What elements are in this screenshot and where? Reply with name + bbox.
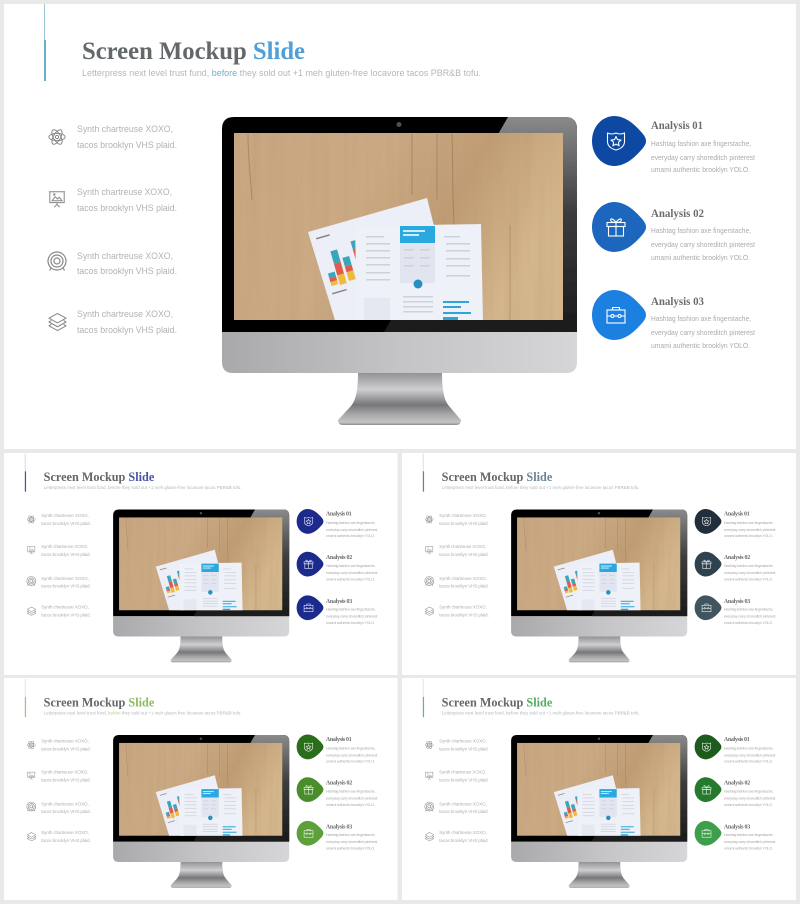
feature list: Synth chartreuse XOXO, <box>41 576 89 581</box>
feature list: Synth chartreuse XOXO, <box>439 738 487 743</box>
feature list <box>425 738 489 843</box>
feature list: Synth chartreuse XOXO, <box>41 830 89 835</box>
feature list: tacos brooklyn VHS plaid. <box>439 778 489 783</box>
feature list: Synth chartreuse XOXO, <box>41 738 89 743</box>
analysis column: Analysis 01 <box>724 737 750 743</box>
feature list: Synth chartreuse XOXO, <box>439 770 486 775</box>
accent bar <box>44 4 46 81</box>
analysis 02: umami authentic brooklyn YOLO. <box>651 253 750 262</box>
feature text 4: Synth chartreuse XOXO, <box>77 309 173 320</box>
title: Screen Mockup Slide <box>442 695 553 709</box>
analysis column: everyday carry shoreditch pinterest <box>724 753 775 757</box>
analysis column: umami authentic brooklyn YOLO. <box>724 803 773 807</box>
analysis column: umami authentic brooklyn YOLO. <box>724 847 773 851</box>
panel: main slide <box>4 4 796 449</box>
accent bar <box>25 453 26 492</box>
analysis column: Analysis 02 <box>326 781 352 787</box>
feature text 2: tacos brooklyn VHS plaid. <box>77 203 177 214</box>
analysis column: Hashtag fashion axe fingerstache, <box>724 833 773 837</box>
analysis column: umami authentic brooklyn YOLO. <box>724 621 773 625</box>
analysis column <box>695 735 775 851</box>
analysis column: Analysis 02 <box>724 781 750 787</box>
analysis column: Analysis 03 <box>724 824 750 830</box>
icon: atom <box>49 128 65 146</box>
analysis column: everyday carry shoreditch pinterest <box>724 840 775 844</box>
analysis column: Analysis 01 <box>326 737 352 743</box>
subtitle: Letterpress next level trust fund, before they sold out +1 meh gluten-free locavore tacos PBR&B tofu. <box>44 711 242 716</box>
analysis column <box>297 509 377 625</box>
analysis column: umami authentic brooklyn YOLO. <box>724 577 773 581</box>
analysis column: Hashtag fashion axe fingerstache, <box>326 833 375 837</box>
feature text 3: tacos brooklyn VHS plaid. <box>77 266 177 277</box>
feature list: Synth chartreuse XOXO, <box>439 801 487 806</box>
feature list: Synth chartreuse XOXO, <box>439 544 486 549</box>
feature list: tacos brooklyn VHS plaid. <box>439 613 489 618</box>
feature list: tacos brooklyn VHS plaid. <box>439 552 489 557</box>
title: Screen Mockup Slide <box>442 470 553 484</box>
analysis column: umami authentic brooklyn YOLO. <box>326 847 375 851</box>
analysis column: everyday carry shoreditch pinterest <box>326 840 377 844</box>
analysis column: everyday carry shoreditch pinterest <box>724 571 775 575</box>
analysis column: Hashtag fashion axe fingerstache, <box>326 608 375 612</box>
title: Screen Mockup Slide <box>44 695 155 709</box>
analysis column: everyday carry shoreditch pinterest <box>326 753 377 757</box>
feature list: Synth chartreuse XOXO, <box>41 605 89 610</box>
feature text 3 <box>77 251 177 277</box>
feature list: tacos brooklyn VHS plaid. <box>41 552 91 557</box>
analysis column: Hashtag fashion axe fingerstache, <box>326 521 375 525</box>
analysis 01 <box>592 116 756 174</box>
feature list: tacos brooklyn VHS plaid. <box>439 521 489 526</box>
feature list: tacos brooklyn VHS plaid. <box>41 521 91 526</box>
analysis column: Analysis 01 <box>326 511 352 517</box>
analysis column: umami authentic brooklyn YOLO. <box>724 534 773 538</box>
analysis column: Analysis 02 <box>724 555 750 561</box>
analysis column: umami authentic brooklyn YOLO. <box>724 759 773 763</box>
analysis column: Hashtag fashion axe fingerstache, <box>724 790 773 794</box>
subtitle: Letterpress next level trust fund, before they sold out +1 meh gluten-free locavore tacos PBR&B tofu. <box>442 711 640 716</box>
analysis column: Analysis 03 <box>326 824 352 830</box>
feature list: tacos brooklyn VHS plaid. <box>41 838 91 843</box>
analysis 01: Hashtag fashion axe fingerstache, <box>651 139 751 148</box>
feature text 1 <box>77 124 177 151</box>
accent bar <box>423 679 424 717</box>
panel: navy variant slide <box>4 453 398 675</box>
panel: olive green variant slide <box>4 678 398 900</box>
analysis 03 <box>592 290 756 350</box>
analysis column: Hashtag fashion axe fingerstache, <box>724 746 773 750</box>
feature text 3: Synth chartreuse XOXO, <box>77 251 173 262</box>
analysis column: umami authentic brooklyn YOLO. <box>326 621 375 625</box>
feature list <box>27 738 91 843</box>
feature list: Synth chartreuse XOXO, <box>41 513 89 518</box>
panel: forest green variant slide <box>402 678 796 900</box>
feature list: tacos brooklyn VHS plaid. <box>439 809 489 814</box>
analysis 03: everyday carry shoreditch pinterest <box>651 328 756 337</box>
analysis column: umami authentic brooklyn YOLO. <box>326 534 375 538</box>
monitor mockup <box>511 735 687 888</box>
icon: target <box>48 252 66 270</box>
feature text 4: tacos brooklyn VHS plaid. <box>77 325 177 336</box>
analysis column: Hashtag fashion axe fingerstache, <box>326 746 375 750</box>
analysis column: Analysis 02 <box>326 555 352 561</box>
analysis column: everyday carry shoreditch pinterest <box>326 528 377 532</box>
analysis column <box>695 509 775 625</box>
panel: slate variant slide <box>402 453 796 675</box>
feature list: Synth chartreuse XOXO, <box>41 770 88 775</box>
monitor mockup <box>113 735 289 888</box>
feature text 1: tacos brooklyn VHS plaid. <box>77 140 177 151</box>
icon: layers <box>49 313 66 331</box>
feature list: Synth chartreuse XOXO, <box>439 830 487 835</box>
analysis column: umami authentic brooklyn YOLO. <box>326 759 375 763</box>
analysis column: Hashtag fashion axe fingerstache, <box>326 564 375 568</box>
analysis column: everyday carry shoreditch pinterest <box>326 615 377 619</box>
feature list: tacos brooklyn VHS plaid. <box>439 838 489 843</box>
analysis 01: Analysis 01 <box>651 118 703 132</box>
feature list: tacos brooklyn VHS plaid. <box>41 583 91 588</box>
analysis 03: Hashtag fashion axe fingerstache, <box>651 314 751 323</box>
monitor mockup <box>222 117 577 425</box>
analysis 02: Analysis 02 <box>651 206 704 220</box>
analysis column: Hashtag fashion axe fingerstache, <box>724 521 773 525</box>
analysis 02: Hashtag fashion axe fingerstache, <box>651 226 751 235</box>
analysis column: everyday carry shoreditch pinterest <box>724 615 775 619</box>
feature list: Synth chartreuse XOXO, <box>41 544 88 549</box>
analysis column: Analysis 03 <box>326 599 352 605</box>
feature list: tacos brooklyn VHS plaid. <box>41 613 91 618</box>
analysis column: Analysis 03 <box>724 599 750 605</box>
monitor mockup <box>511 510 687 662</box>
accent bar <box>25 679 26 717</box>
analysis column: Hashtag fashion axe fingerstache, <box>724 564 773 568</box>
analysis column: everyday carry shoreditch pinterest <box>724 528 775 532</box>
feature list <box>27 513 91 618</box>
feature list: tacos brooklyn VHS plaid. <box>41 778 91 783</box>
analysis column: everyday carry shoreditch pinterest <box>326 571 377 575</box>
analysis column: umami authentic brooklyn YOLO. <box>326 577 375 581</box>
analysis 02: everyday carry shoreditch pinterest <box>651 240 756 249</box>
title: Screen Mockup Slide <box>82 38 305 65</box>
accent bar <box>423 453 424 492</box>
feature list: tacos brooklyn VHS plaid. <box>439 746 489 751</box>
feature list: Synth chartreuse XOXO, <box>439 605 487 610</box>
analysis column: Hashtag fashion axe fingerstache, <box>724 608 773 612</box>
analysis column: everyday carry shoreditch pinterest <box>326 797 377 801</box>
analysis column: Analysis 01 <box>724 511 750 517</box>
feature text 4 <box>77 309 177 336</box>
feature list <box>425 513 489 618</box>
title: Screen Mockup Slide <box>44 470 155 484</box>
analysis 01: umami authentic brooklyn YOLO. <box>651 165 750 174</box>
analysis 02 <box>592 202 756 262</box>
analysis 01: everyday carry shoreditch pinterest <box>651 153 756 162</box>
analysis column: umami authentic brooklyn YOLO. <box>326 803 375 807</box>
monitor mockup <box>113 510 289 662</box>
analysis column: Hashtag fashion axe fingerstache, <box>326 790 375 794</box>
subtitle: Letterpress next level trust fund, before they sold out +1 meh gluten-free locavore tacos PBR&B tofu. <box>442 485 640 490</box>
feature text 2: Synth chartreuse XOXO, <box>77 187 172 198</box>
feature text 2 <box>77 187 177 214</box>
analysis 03: umami authentic brooklyn YOLO. <box>651 341 750 350</box>
feature list: tacos brooklyn VHS plaid. <box>439 583 489 588</box>
feature list: tacos brooklyn VHS plaid. <box>41 746 91 751</box>
feature list: Synth chartreuse XOXO, <box>439 576 487 581</box>
analysis 03: Analysis 03 <box>651 294 704 308</box>
subtitle: Letterpress next level trust fund, before they sold out +1 meh gluten-free locavore tacos PBR&B tofu. <box>44 485 242 490</box>
icon: presentation board <box>49 192 65 207</box>
feature list: Synth chartreuse XOXO, <box>439 513 487 518</box>
feature list: Synth chartreuse XOXO, <box>41 801 89 806</box>
analysis column: everyday carry shoreditch pinterest <box>724 797 775 801</box>
feature text 1: Synth chartreuse XOXO, <box>77 124 173 135</box>
feature list: tacos brooklyn VHS plaid. <box>41 809 91 814</box>
subtitle: Letterpress next level trust fund, before they sold out +1 meh gluten-free locavore tacos PBR&B tofu. <box>82 68 481 79</box>
feature list <box>48 124 177 336</box>
analysis column <box>297 735 377 851</box>
